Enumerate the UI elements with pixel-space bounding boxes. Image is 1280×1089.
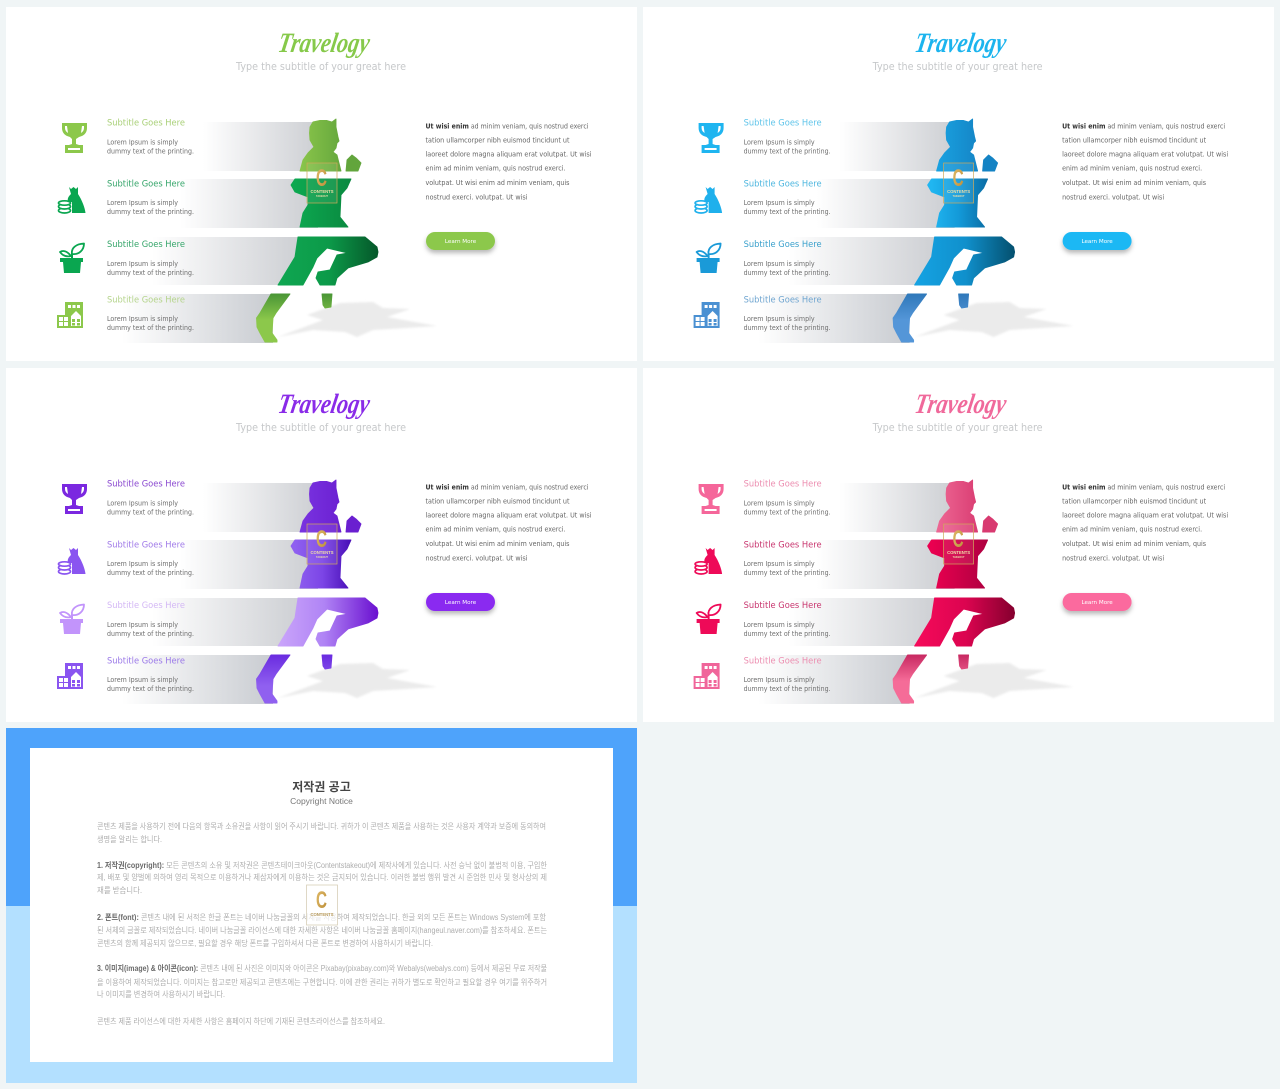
row 3 text: Lorem Ipsum is simply	[107, 621, 178, 629]
row 2 text: dummy text of the printing.	[107, 208, 194, 216]
row 2 text: Subtitle Goes Here	[744, 540, 822, 550]
row 3 text: dummy text of the printing.	[107, 269, 194, 277]
row 2 text: Subtitle Goes Here	[744, 178, 822, 190]
icon: plant	[60, 604, 84, 634]
paragraph: volutpat. Ut wisi enim ad minim veniam, quis	[1062, 178, 1206, 187]
row 3 text	[744, 239, 831, 277]
panel: pink Travelogy slide	[643, 368, 1274, 722]
button: Learn More	[426, 232, 495, 250]
button: Learn More	[1063, 232, 1132, 250]
row 4 text: dummy text of the printing.	[744, 685, 831, 693]
copyright intro: 생명을 알리는 합니다.	[97, 834, 162, 844]
runner silhouette	[893, 119, 1015, 342]
runner silhouette	[256, 119, 378, 342]
paragraph: tation ullamcorper nibh euismod tincidunt ut	[426, 136, 570, 144]
section 3: image and icon: 나 이미지를 변경하여 사용하시기 바랍니다.	[97, 989, 225, 999]
paragraph: volutpat. Ut wisi enim ad minim veniam, quis	[426, 178, 570, 187]
paragraph: nostrud exerci. volutpat. Ut wisi	[426, 554, 528, 562]
title: Travelogy	[912, 28, 1009, 59]
row 3 text	[107, 600, 194, 638]
row 2 text: Lorem Ipsum is simply	[107, 199, 178, 207]
watermark logo: CONTENTS	[310, 550, 334, 555]
gray bands	[120, 483, 320, 704]
row 2 text: Lorem Ipsum is simply	[744, 199, 815, 207]
section 2: font	[97, 912, 547, 948]
watermark logo	[307, 163, 337, 203]
row 4 text: Subtitle Goes Here	[107, 656, 185, 666]
watermark logo: TAKEOUT	[953, 556, 965, 559]
button: Learn More	[1063, 593, 1132, 611]
section 3: image and icon: 3. 이미지(image) & 아이콘(icon): 콘텐츠 내에 된 사진은 이미지와 아이콘은 Pixabay(pixabay.com)와 Webalys(webalys.com) 등에서 제공된 무료 저작물	[97, 963, 547, 973]
row 4 text: dummy text of the printing.	[107, 685, 194, 693]
button: Learn More: Learn More	[445, 600, 477, 606]
row 4 text	[107, 656, 194, 693]
shadow of runner	[278, 663, 437, 698]
row 2 text	[744, 540, 831, 577]
row 1 text	[744, 478, 831, 516]
gray bands	[120, 122, 320, 343]
icon: plant	[697, 244, 721, 273]
copyright intro: 콘텐츠 제품을 사용하기 전에 다음의 항목과 소유권을 사항이 읽어 주시기 바랍니다. 귀하가 이 콘텐츠 제품을 사용하는 것은 사용자 계약과 보증에 동의하여	[97, 821, 546, 831]
watermark logo: CONTENTS	[310, 912, 334, 917]
watermark logo: TAKEOUT	[316, 195, 328, 198]
row 4 text	[744, 656, 831, 693]
row 1 text: Subtitle Goes Here	[107, 478, 185, 490]
row 1 text: Lorem Ipsum is simply	[107, 500, 178, 508]
icon: plant	[697, 604, 721, 634]
paragraph: Ut wisi enim ad minim veniam, quis nostrud exerci	[1062, 482, 1225, 492]
paragraph: Ut wisi enim ad minim veniam, quis nostrud exerci	[1062, 122, 1225, 130]
icon: buildings	[694, 302, 720, 328]
section 3: image and icon	[97, 963, 547, 999]
subtitle: Type the subtitle of your great here	[872, 422, 1043, 434]
row 3 text: Subtitle Goes Here	[107, 239, 185, 250]
button: Learn More	[426, 593, 495, 611]
row 4 text	[744, 294, 831, 332]
panel: blue Travelogy slide	[643, 7, 1274, 361]
row 1 text: Subtitle Goes Here	[107, 118, 185, 128]
subtitle: Type the subtitle of your great here	[235, 422, 406, 434]
button: Learn More: Learn More	[1081, 600, 1113, 606]
icon: trophy	[62, 484, 87, 514]
row 4 text: Lorem Ipsum is simply	[107, 315, 178, 323]
row 1 text	[744, 118, 831, 156]
paragraph: laoreet dolore magna aliquam erat volutpat. Ut wisi	[1062, 510, 1228, 520]
paragraph: laoreet dolore magna aliquam erat volutpat. Ut wisi	[426, 510, 592, 520]
section 2: font: 콘텐츠의 함께 제공되지 않으므로, 필요할 경우 해당 폰트를 구입하셔서 다른 폰트로 변경하여 사용하시기 바랍니다.	[97, 938, 433, 948]
row 3 text: Lorem Ipsum is simply	[107, 260, 178, 268]
row 2 text	[107, 178, 194, 216]
row 1 text: Subtitle Goes Here	[744, 478, 822, 490]
row 2 text: Lorem Ipsum is simply	[107, 560, 178, 568]
watermark logo: C	[953, 526, 964, 553]
panel: green Travelogy slide	[6, 7, 637, 361]
icon: money bag	[58, 548, 86, 574]
icon: money bag	[695, 548, 722, 574]
copyright subheading: Copyright Notice	[290, 796, 353, 806]
row 1 text: dummy text of the printing.	[744, 508, 831, 516]
row 1 text: Lorem Ipsum is simply	[744, 138, 815, 146]
paragraph: enim ad minim veniam, quis nostrud exerci.	[426, 164, 566, 172]
row 2 text: dummy text of the printing.	[744, 569, 831, 577]
row 3 text	[107, 239, 194, 277]
paragraph: tation ullamcorper nibh euismod tincidunt ut	[1062, 136, 1206, 144]
section 2: font: 된 서체의 글꼴로 제작되었습니다. 네이버 나눔글꼴 라이선스에 대한 자세한 사항은 네이버 나눔글꼴 홈페이지(hangeul.naver.com)를 참조하세요. 폰트는	[97, 925, 547, 935]
row 1 text	[107, 478, 194, 516]
row 4 text: Lorem Ipsum is simply	[107, 676, 178, 684]
row 2 text: Subtitle Goes Here	[107, 178, 185, 190]
row 2 text	[744, 178, 831, 216]
icon: trophy	[699, 123, 724, 153]
button: Learn More: Learn More	[445, 239, 477, 245]
row 3 text: Subtitle Goes Here	[744, 600, 822, 611]
paragraph	[1062, 482, 1228, 562]
title: Travelogy	[912, 389, 1009, 420]
paragraph: Ut wisi enim ad minim veniam, quis nostrud exerci	[426, 122, 588, 130]
row 1 text: dummy text of the printing.	[107, 508, 194, 516]
section 1: copyright: 제, 배포 및 양벌에 의하여 영리 목적으로 이용하거나 제삼자에게 이용하는 것은 금지되어 있습니다. 이러한 불법 행위 발견 시 준엄한 민사 및 형사상의 제	[97, 872, 547, 882]
panel: copyright notice	[6, 728, 637, 1083]
shadow of runner	[915, 663, 1074, 698]
row 3 text: dummy text of the printing.	[744, 630, 831, 638]
watermark logo: C	[316, 165, 327, 192]
panel: purple Travelogy slide	[6, 368, 637, 722]
title: Travelogy	[276, 389, 373, 420]
copyright heading: 저작권 공고	[292, 779, 351, 794]
row 3 text: Subtitle Goes Here	[744, 239, 822, 250]
row 4 text	[107, 294, 194, 332]
row 4 text: Lorem Ipsum is simply	[744, 676, 815, 684]
paragraph: volutpat. Ut wisi enim ad minim veniam, quis	[426, 539, 570, 548]
button: Learn More: Learn More	[1081, 239, 1113, 245]
shadow of runner	[915, 302, 1074, 337]
watermark logo: C	[953, 165, 964, 192]
paragraph: enim ad minim veniam, quis nostrud exerci.	[426, 524, 566, 534]
runner silhouette	[256, 480, 378, 703]
icon: buildings	[694, 663, 720, 689]
paragraph: nostrud exerci. volutpat. Ut wisi	[1062, 554, 1164, 562]
row 3 text: Lorem Ipsum is simply	[744, 621, 815, 629]
watermark logo: C	[316, 526, 327, 553]
watermark logo: CONTENTS	[310, 189, 334, 194]
paragraph: nostrud exerci. volutpat. Ut wisi	[426, 192, 528, 202]
row 2 text: dummy text of the printing.	[107, 569, 194, 577]
shadow of runner	[278, 302, 437, 337]
section 1: copyright: 재를 받습니다.	[97, 885, 142, 895]
row 4 text: Subtitle Goes Here	[107, 294, 185, 306]
paragraph: volutpat. Ut wisi enim ad minim veniam, quis	[1062, 539, 1206, 548]
title: Travelogy	[276, 28, 373, 59]
icon: trophy	[62, 123, 87, 153]
row 4 text: Subtitle Goes Here	[744, 294, 822, 306]
row 2 text: Lorem Ipsum is simply	[744, 560, 815, 568]
icon: money bag	[695, 187, 722, 213]
row 3 text: dummy text of the printing.	[744, 269, 831, 277]
watermark logo: TAKEOUT	[953, 195, 965, 198]
row 4 text: dummy text of the printing.	[107, 324, 194, 332]
section 1: copyright	[97, 860, 548, 895]
paragraph: laoreet dolore magna aliquam erat volutpat. Ut wisi	[426, 150, 592, 158]
watermark logo	[306, 885, 338, 925]
icon: plant	[60, 244, 84, 273]
row 1 text	[107, 118, 194, 156]
paragraph	[426, 482, 592, 562]
row 4 text: dummy text of the printing.	[744, 324, 831, 332]
paragraph: tation ullamcorper nibh euismod tincidunt ut	[1062, 496, 1206, 506]
paragraph: enim ad minim veniam, quis nostrud exerci.	[1062, 524, 1202, 534]
row 1 text: dummy text of the printing.	[107, 148, 194, 156]
row 1 text: Lorem Ipsum is simply	[107, 138, 178, 146]
subtitle: Type the subtitle of your great here	[872, 61, 1043, 73]
row 3 text: Subtitle Goes Here	[107, 600, 185, 611]
runner silhouette	[893, 480, 1015, 703]
row 2 text: dummy text of the printing.	[744, 208, 831, 216]
row 2 text	[107, 540, 194, 577]
paragraph	[1062, 122, 1228, 202]
icon: trophy	[699, 484, 724, 514]
row 3 text: Lorem Ipsum is simply	[744, 260, 815, 268]
section 1: copyright: 1. 저작권(copyright): 모든 콘텐츠의 소유 및 저작권은 콘텐츠테이크아웃(Contentstakeout)에 제작사에게 있습니다. 사전 승낙 없이 불법적 이용, 구입한	[97, 860, 548, 870]
row 2 text: Subtitle Goes Here	[107, 540, 185, 550]
section 2: font: 2. 폰트(font): 콘텐츠 내에 된 서적은 한글 폰트는 네이버 나눔글꼴의 서체를 사용하여 제작되었습니다. 한글 외의 모든 폰트는 Windows System에 포함	[97, 912, 547, 922]
watermark logo	[944, 524, 974, 564]
row 4 text: Lorem Ipsum is simply	[744, 315, 815, 323]
gray bands	[757, 483, 957, 704]
paragraph: tation ullamcorper nibh euismod tincidunt ut	[426, 496, 570, 506]
closing line: 콘텐츠 제품 라이선스에 대한 자세한 사항은 홈페이지 하단에 기재된 콘텐츠라이선스를 참조하세요.	[97, 1016, 385, 1026]
watermark logo: C	[316, 887, 327, 914]
copyright intro	[97, 821, 546, 844]
row 1 text: Lorem Ipsum is simply	[744, 500, 815, 508]
watermark logo	[944, 163, 974, 203]
icon: buildings	[57, 302, 83, 328]
paragraph: laoreet dolore magna aliquam erat volutpat. Ut wisi	[1062, 150, 1228, 158]
row 3 text: dummy text of the printing.	[107, 630, 194, 638]
row 1 text: dummy text of the printing.	[744, 148, 831, 156]
gray bands	[757, 122, 957, 343]
watermark logo	[307, 524, 337, 564]
paragraph: nostrud exerci. volutpat. Ut wisi	[1062, 192, 1164, 202]
paragraph: enim ad minim veniam, quis nostrud exerci.	[1062, 164, 1202, 172]
watermark logo: CONTENTS	[947, 189, 970, 194]
watermark logo: TAKEOUT	[316, 556, 328, 559]
row 4 text: Subtitle Goes Here	[744, 656, 822, 666]
watermark logo: CONTENTS	[947, 550, 970, 555]
icon: buildings	[57, 663, 83, 689]
row 1 text: Subtitle Goes Here	[744, 118, 822, 128]
subtitle: Type the subtitle of your great here	[235, 61, 406, 73]
paragraph: Ut wisi enim ad minim veniam, quis nostrud exerci	[426, 482, 588, 492]
section 3: image and icon: 을 이용하여 제작되었습니다. 이미지는 참고로만 제공되고 콘텐츠에는 구현합니다. 이에 관한 권리는 귀하가 별도로 확인하고 필요할 경우 여기를 위주하거	[97, 977, 547, 987]
paragraph	[426, 122, 592, 202]
row 3 text	[744, 600, 831, 638]
icon: money bag	[58, 187, 86, 213]
